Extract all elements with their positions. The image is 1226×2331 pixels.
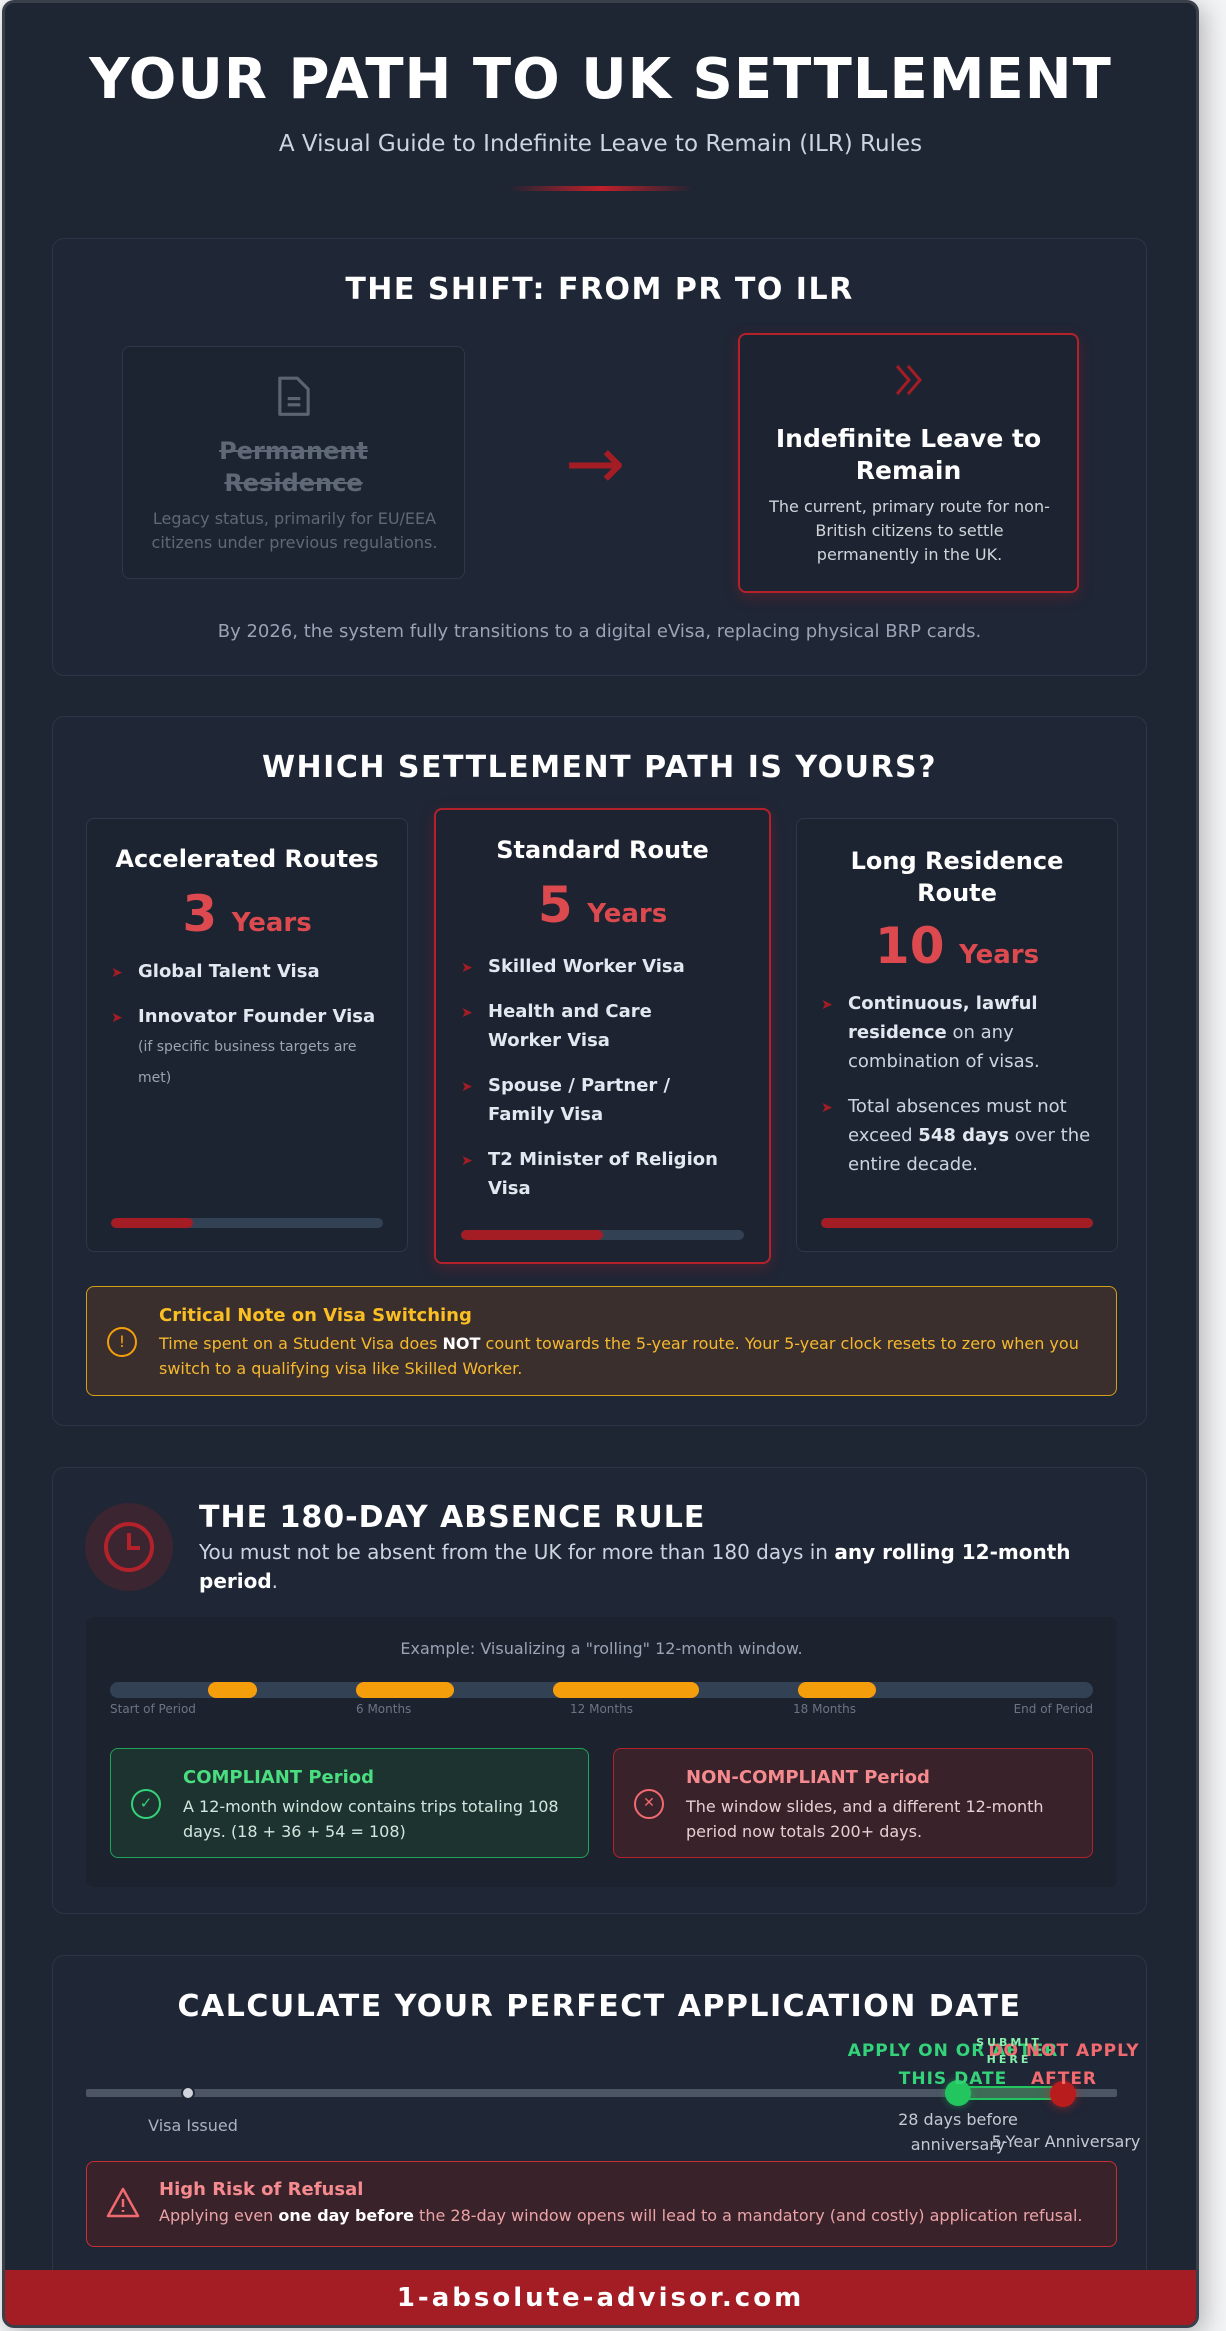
card: long residence: Route bbox=[917, 879, 997, 907]
card: standard: Spouse / Partner / Family Visa bbox=[488, 1075, 670, 1125]
timeline example: 18 Months bbox=[793, 1702, 856, 1716]
card: permanent residence: Permanent bbox=[219, 437, 368, 465]
icon: warning circle bbox=[107, 1327, 137, 1357]
timeline example: 6 Months bbox=[356, 1702, 411, 1716]
footer note: By 2026, the system fully transitions to a digital eVisa, replacing physical BRP cards. bbox=[218, 621, 981, 642]
card: long residence: Continuous, lawful residence on any combination of visas. bbox=[848, 993, 1040, 1072]
card: accelerated: Innovator Founder Visa bbox=[138, 1006, 375, 1027]
callout: compliant: COMPLIANT Period bbox=[183, 1767, 374, 1788]
card: accelerated bbox=[86, 818, 408, 1252]
card: standard: Standard Route bbox=[496, 836, 709, 864]
card: accelerated: Global Talent Visa bbox=[138, 961, 320, 982]
title: YOUR PATH TO UK SETTLEMENT bbox=[89, 47, 1112, 112]
callout: compliant: ✓ bbox=[140, 1794, 152, 1812]
callout: non-compliant: ✕ bbox=[643, 1795, 655, 1811]
card: ILR bbox=[738, 333, 1079, 593]
callout: non-compliant bbox=[613, 1748, 1093, 1858]
card: accelerated: (if specific business targets are met) bbox=[138, 1039, 356, 1086]
callout: visa switching bbox=[86, 1286, 1117, 1396]
panel: 180-day rule: You must not be absent from the UK for more than 180 days in any rolling 12-month period. bbox=[199, 1540, 1071, 1593]
chart: application timeline: AFTER bbox=[1031, 2069, 1097, 2089]
callout: visa switching: Time spent on a Student Visa does NOT count towards the 5-year route. Your 5-year clock resets to zero when you switch to a qualifying visa like Skilled Worker. bbox=[159, 1334, 1079, 1378]
chart: application timeline: 28 days before bbox=[898, 2110, 1018, 2129]
chart: application timeline: SUBMIT bbox=[976, 2036, 1042, 2049]
chart: application timeline: HERE bbox=[987, 2053, 1031, 2066]
chart: application timeline: Visa Issued bbox=[148, 2116, 238, 2135]
heading: paths: WHICH SETTLEMENT PATH IS YOURS? bbox=[262, 750, 937, 785]
chart: application timeline: anniversary bbox=[911, 2135, 1005, 2154]
card: long residence: 10 Years bbox=[875, 917, 1039, 975]
panel: 180-day rule bbox=[52, 1467, 1147, 1914]
panel: application date bbox=[52, 1955, 1147, 2331]
heading: 180-day: THE 180-DAY ABSENCE RULE bbox=[199, 1500, 705, 1535]
icon: document bbox=[278, 376, 310, 416]
card: standard: 5 Years bbox=[538, 876, 667, 934]
chart: application timeline: DO NOT APPLY bbox=[988, 2041, 1140, 2061]
callout: non-compliant: The window slides, and a different 12-month period now totals 200+ days. bbox=[686, 1797, 1044, 1841]
card: permanent residence: Residence bbox=[224, 469, 363, 497]
callout: compliant bbox=[110, 1748, 589, 1858]
footer: 1-absolute-advisor.com bbox=[397, 2283, 804, 2313]
timeline example: Example: Visualizing a "rolling" 12-month window. bbox=[400, 1639, 803, 1658]
chart: application timeline bbox=[86, 2036, 1140, 2154]
chart: application timeline: 5-Year Anniversary bbox=[992, 2132, 1140, 2151]
card: permanent residence: Legacy status, primarily for EU/EEA citizens under previous regulations. bbox=[152, 509, 437, 552]
card: accelerated: Accelerated Routes bbox=[115, 845, 379, 873]
timeline example: Start of Period bbox=[110, 1702, 196, 1716]
callout: high risk: Applying even one day before the 28-day window opens will lead to a mandatory (and costly) application refusal. bbox=[159, 2206, 1082, 2225]
card: ILR: Remain bbox=[856, 456, 961, 485]
card: long residence: Total absences must not exceed 548 days over the entire decade. bbox=[848, 1096, 1090, 1175]
card: long residence: Long Residence bbox=[851, 847, 1063, 875]
timeline example: 12 Months bbox=[570, 1702, 633, 1716]
timeline example bbox=[86, 1617, 1117, 1887]
icon: clock bbox=[85, 1503, 173, 1591]
card: standard: Health and Care Worker Visa bbox=[488, 1001, 652, 1051]
timeline example: End of Period bbox=[1014, 1702, 1093, 1716]
card: ILR: Indefinite Leave to bbox=[776, 424, 1041, 453]
heading: shift: THE SHIFT: FROM PR TO ILR bbox=[345, 272, 854, 307]
icon: chevrons bbox=[896, 365, 922, 395]
panel: settlement paths bbox=[52, 716, 1147, 1426]
panel: the shift bbox=[52, 238, 1147, 676]
footer bbox=[5, 2270, 1196, 2330]
chart: application timeline: THIS DATE bbox=[899, 2069, 1007, 2089]
card: long residence bbox=[796, 818, 1118, 1252]
card: accelerated: 3 Years bbox=[182, 885, 312, 943]
card: standard: Skilled Worker Visa bbox=[488, 956, 685, 977]
card: standard bbox=[434, 808, 771, 1264]
arrow: → bbox=[565, 421, 625, 505]
callout: compliant: A 12-month window contains trips totaling 108 days. (18 + 36 + 54 = 108) bbox=[183, 1797, 559, 1841]
chart: absence bar bbox=[110, 1682, 1093, 1698]
icon: warning circle: ! bbox=[119, 1332, 125, 1351]
card: permanent residence bbox=[122, 346, 465, 579]
card: ILR: The current, primary route for non-British citizens to settle permanently in the UK. bbox=[769, 497, 1050, 564]
chart: application timeline: APPLY ON OR AFTER bbox=[848, 2041, 1058, 2061]
callout: high risk: High Risk of Refusal bbox=[159, 2179, 363, 2200]
subtitle: A Visual Guide to Indefinite Leave to Remain (ILR) Rules bbox=[279, 131, 922, 157]
heading: application date: CALCULATE YOUR PERFECT APPLICATION DATE bbox=[178, 1989, 1022, 2024]
callout: high risk bbox=[86, 2161, 1117, 2247]
callout: non-compliant: NON-COMPLIANT Period bbox=[686, 1767, 930, 1788]
card: standard: T2 Minister of Religion Visa bbox=[488, 1149, 718, 1199]
callout: visa switching: Critical Note on Visa Switching bbox=[159, 1305, 472, 1326]
